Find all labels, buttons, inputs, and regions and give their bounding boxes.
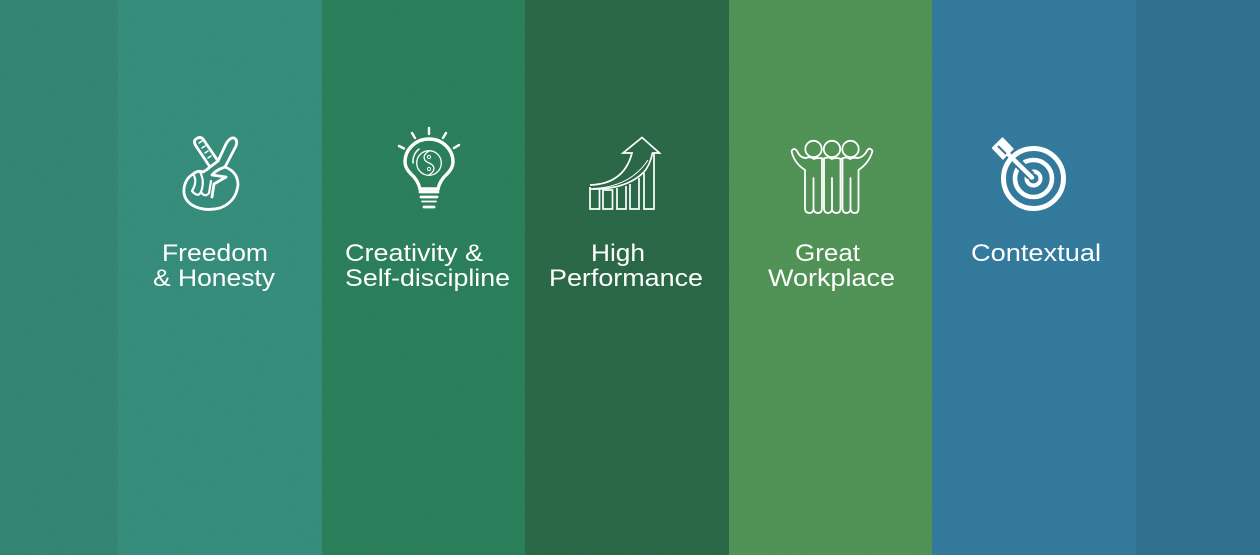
label: Great Workplace: Workplace (768, 265, 895, 292)
panel: right edge stripe (1136, 0, 1260, 555)
panel: freedom and honesty (118, 0, 322, 555)
icon: light bulb with yin-yang (399, 128, 459, 207)
panel: high performance (525, 0, 729, 555)
icon: three people embracing (792, 141, 872, 213)
icon: peace hand (184, 138, 238, 209)
label: Contextual: Contextual (971, 240, 1101, 267)
label: Creativity & Self-discipline: Self-discipline (345, 265, 510, 292)
icon: target with arrow (992, 138, 1064, 208)
label: High Performance (549, 240, 703, 292)
label: Great Workplace (768, 240, 895, 292)
label: High Performance: Performance (549, 265, 703, 292)
panel: great workplace (729, 0, 932, 555)
panel: left edge stripe (0, 0, 118, 555)
icon: rising bar chart with arrow (590, 138, 660, 209)
label: High Performance: High (591, 240, 645, 267)
label: Freedom & Honesty: Freedom (162, 240, 268, 267)
label: Freedom & Honesty: & Honesty (153, 265, 275, 292)
panel: creativity and self-discipline (322, 0, 525, 555)
panel: contextual (932, 0, 1136, 555)
label: Freedom & Honesty (153, 240, 275, 292)
label: Creativity & Self-discipline (345, 240, 510, 292)
label: Creativity & Self-discipline: Creativity & (345, 240, 483, 267)
label: Great Workplace: Great (795, 240, 860, 267)
